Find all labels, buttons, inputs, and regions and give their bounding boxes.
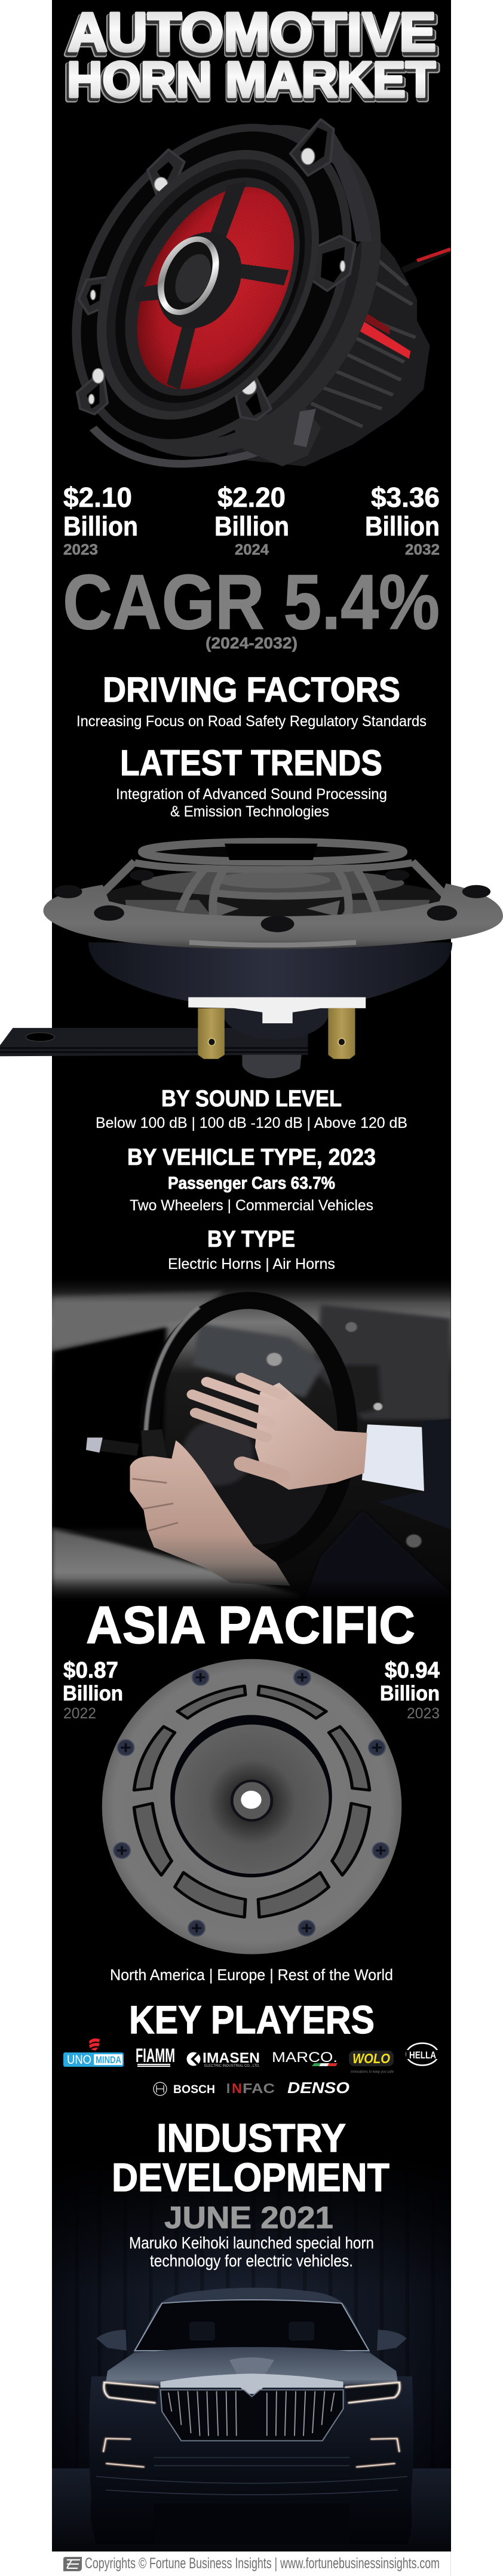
logo: Uno Minda: MINDA xyxy=(96,2054,121,2066)
mounting lugs xyxy=(77,120,355,420)
by vehicle type xyxy=(127,1145,376,1214)
driving factors xyxy=(76,671,427,730)
logo: Hella: HELLA xyxy=(409,2049,436,2061)
logo: Imasen xyxy=(186,2050,260,2068)
June 2021 development text: technology for electric vehicles. xyxy=(150,2251,353,2270)
driving factors: DRIVING FACTORS xyxy=(103,671,400,709)
Asia Pacific value 2022: Billion xyxy=(63,1682,123,1705)
latest trends: & Emission Technologies xyxy=(170,803,329,820)
speaker-style horn illustration xyxy=(72,118,450,467)
center hole xyxy=(241,1791,262,1809)
value 2032 xyxy=(365,482,440,558)
by type: BY TYPE xyxy=(207,1226,295,1252)
title: AUTOMOTIVE xyxy=(66,5,438,66)
grille xyxy=(160,2390,343,2441)
bottom bracket xyxy=(93,428,298,464)
logo: Uno Minda: UNO xyxy=(67,2053,91,2067)
Asia Pacific value 2023: $0.94 xyxy=(385,1658,440,1683)
chrome bolts xyxy=(88,148,345,404)
logo: Wolo: Innovations to keep you safe xyxy=(351,2070,394,2074)
industry development heading: INDUSTRY xyxy=(157,2116,346,2161)
flange xyxy=(43,883,503,949)
Asia Pacific value 2023 xyxy=(380,1658,440,1722)
logo: Infac: FAC xyxy=(243,2081,275,2096)
by sound level xyxy=(96,1086,407,1131)
by vehicle type: Passenger Cars 63.7% xyxy=(168,1174,335,1193)
by type: Electric Horns | Air Horns xyxy=(168,1256,335,1272)
motor housing xyxy=(225,228,430,466)
by sound level: BY SOUND LEVEL xyxy=(161,1086,342,1112)
cuff and jacket xyxy=(379,1419,450,1529)
CAGR: CAGR 5.4% xyxy=(63,558,440,645)
logo: Infac xyxy=(226,2081,275,2096)
top cage xyxy=(93,842,452,916)
horn interior under cage xyxy=(93,877,452,926)
mirrors xyxy=(96,2330,127,2351)
title: AUTOMOTIVE xyxy=(68,2,436,63)
value 2024: Billion xyxy=(214,511,289,541)
title: HORN MARKET xyxy=(65,54,437,110)
June 2021 development text xyxy=(129,2201,374,2270)
logo: Marco: MARCO. xyxy=(272,2049,338,2066)
nut xyxy=(242,1055,302,1078)
value 2023 xyxy=(63,482,138,558)
June 2021 development text: Maruko Keihoki launched special horn xyxy=(129,2234,374,2252)
white terminal block xyxy=(188,998,366,1023)
title xyxy=(65,2,438,111)
logo: Fiamm: FIAMM xyxy=(136,2045,175,2066)
Asia Pacific value 2022: $0.87 xyxy=(63,1658,118,1683)
red mesh cone xyxy=(137,186,294,389)
key players heading: KEY PLAYERS xyxy=(129,1997,375,2042)
center hub xyxy=(158,232,241,329)
value 2032: $3.36 xyxy=(371,482,440,513)
photo: hands on steering wheel xyxy=(52,1277,450,1601)
logo: Bosch xyxy=(154,2082,215,2096)
headlights xyxy=(105,2382,159,2403)
value 2024: 2024 xyxy=(235,541,269,558)
screws xyxy=(54,870,490,932)
value 2032: 2032 xyxy=(405,541,440,558)
steering wheel hub xyxy=(227,1506,317,1544)
driving factors: Increasing Focus on Road Safety Regulatory Standards xyxy=(76,713,427,730)
logo: Denso: DENSO xyxy=(287,2079,349,2097)
roof xyxy=(133,2288,370,2353)
mounting bracket xyxy=(0,1028,308,1056)
CAGR: (2024-2032) xyxy=(206,634,297,652)
photo fades xyxy=(52,1277,450,1601)
value 2024 xyxy=(214,482,289,558)
rubber ring xyxy=(97,149,319,420)
icon: Fortune Business Insights logo xyxy=(63,2557,82,2571)
horn front view illustration xyxy=(102,1659,401,1954)
by sound level: Below 100 dB | 100 dB -120 dB | Above 120 dB xyxy=(96,1115,407,1131)
value 2023: 2023 xyxy=(63,541,98,558)
title: AUTOMOTIVE xyxy=(65,5,438,66)
outer frame xyxy=(72,124,351,443)
value 2024: $2.20 xyxy=(217,482,286,513)
latest trends: LATEST TRENDS xyxy=(120,743,382,783)
title: HORN MARKET xyxy=(67,51,435,108)
spokes xyxy=(135,181,289,390)
by type xyxy=(168,1226,335,1272)
upper hand xyxy=(192,1378,367,1489)
stalk xyxy=(96,1445,138,1450)
industry development heading xyxy=(112,2116,389,2200)
Asia Pacific value 2022: 2022 xyxy=(63,1705,96,1722)
value 2023: $2.10 xyxy=(63,482,132,513)
logo: Fiamm xyxy=(136,2045,175,2067)
value 2023: Billion xyxy=(63,511,138,541)
Asia Pacific heading: ASIA PACIFIC xyxy=(86,1595,415,1654)
logo: Infac: N xyxy=(232,2081,242,2096)
value 2032: Billion xyxy=(365,511,440,541)
logo: Bosch: BOSCH xyxy=(173,2084,215,2096)
Asia Pacific value 2023: Billion xyxy=(380,1682,440,1705)
logos xyxy=(63,2039,439,2097)
screws xyxy=(114,1669,389,1936)
latest trends xyxy=(116,743,387,820)
black panel xyxy=(52,0,451,2551)
horn side view illustration xyxy=(0,842,503,1078)
by vehicle type: Two Wheelers | Commercial Vehicles xyxy=(130,1197,373,1214)
bumper lines xyxy=(96,2458,407,2495)
console lights xyxy=(266,1322,422,1547)
cone xyxy=(175,1724,329,1874)
Asia Pacific value 2023: 2023 xyxy=(407,1705,440,1722)
steering wheel rim xyxy=(150,1301,348,1561)
slots xyxy=(134,1686,370,1917)
logo: Wolo xyxy=(349,2051,394,2074)
June 2021 development text: JUNE 2021 xyxy=(164,2201,333,2235)
hood xyxy=(106,2347,398,2385)
logo: Wolo: WOLO xyxy=(352,2051,390,2066)
logo: Uno Minda xyxy=(63,2039,124,2067)
center boss xyxy=(232,1781,272,1821)
lower hand xyxy=(130,1440,290,1586)
car background and illustration xyxy=(52,2152,450,2551)
inner ring xyxy=(157,1702,346,1888)
gold terminals xyxy=(198,1008,355,1059)
market values xyxy=(63,482,440,558)
logo: Hella xyxy=(406,2043,439,2066)
car body xyxy=(89,2376,413,2544)
wire xyxy=(403,250,450,270)
industry development heading: DEVELOPMENT xyxy=(112,2155,389,2200)
lower lights xyxy=(103,2439,400,2467)
regions: North America | Europe | Rest of the World xyxy=(110,1966,393,1984)
logo: Imasen: IMASEN xyxy=(203,2050,260,2066)
latest trends: Integration of Advanced Sound Processing xyxy=(116,786,387,803)
red stripe xyxy=(360,322,411,359)
horn body xyxy=(88,943,452,1007)
side bright highlight xyxy=(160,2373,343,2394)
title: HORN MARKET xyxy=(65,54,438,111)
windshield xyxy=(135,2300,369,2351)
by vehicle type: BY VEHICLE TYPE, 2023 xyxy=(127,1145,376,1170)
logo: Infac: I xyxy=(226,2081,230,2096)
depth ring xyxy=(142,125,381,457)
dome xyxy=(223,985,329,1040)
logo: Imasen: ELECTRIC INDUSTRIAL CO., LTD. xyxy=(204,2064,260,2068)
Asia Pacific value 2022 xyxy=(63,1658,123,1722)
footer xyxy=(52,2551,451,2576)
